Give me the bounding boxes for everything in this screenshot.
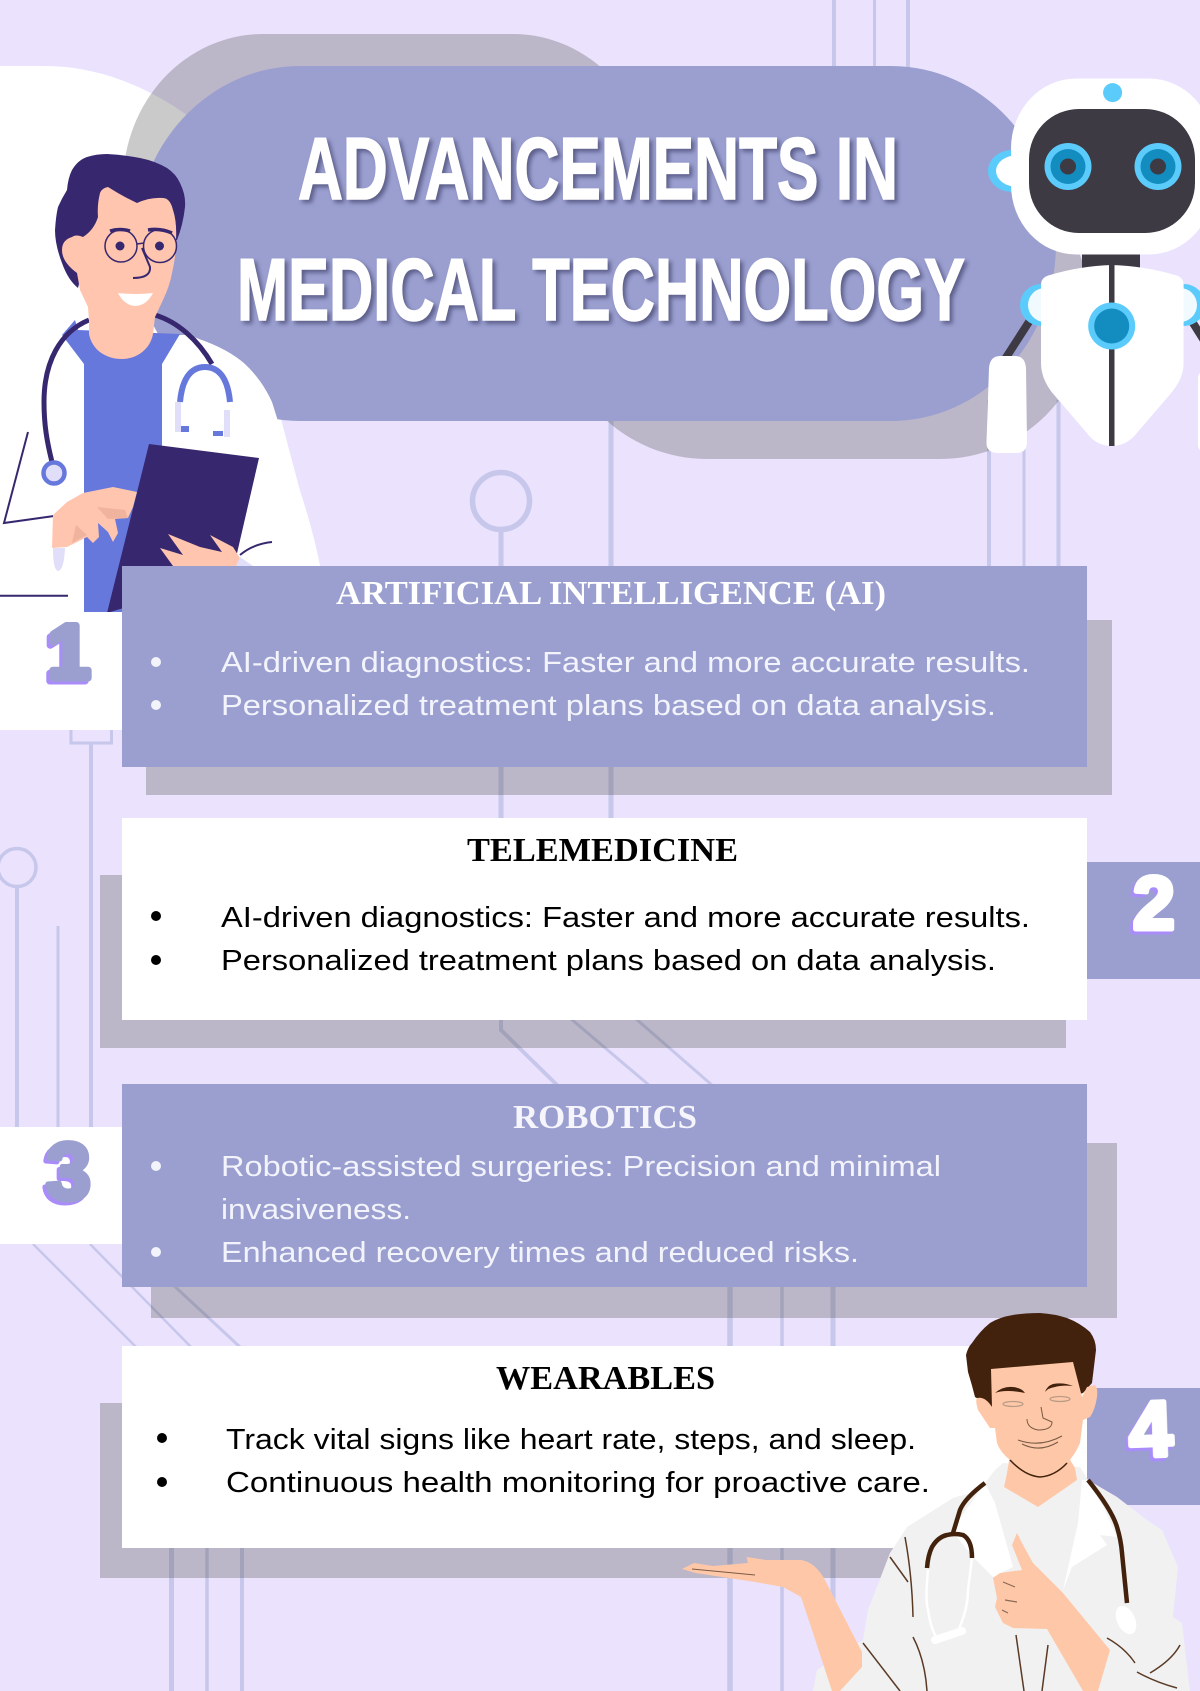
bullet list: telemedicine: AI-driven diagnostics: Faster and more accurate results. — [221, 902, 1030, 934]
illustration: robot — [986, 78, 1200, 453]
bullet list: wearables — [157, 1424, 930, 1499]
bullet list: telemedicine — [151, 902, 1030, 977]
number tab 4: 4 — [1127, 1384, 1174, 1474]
title — [237, 119, 965, 339]
title: ADVANCEMENTS IN — [298, 119, 898, 218]
white backdrop behind doctor — [0, 66, 321, 730]
panel: telemedicine — [100, 818, 1087, 1048]
illustration: doctor with clipboard — [0, 154, 321, 613]
number tab 3: 3 — [46, 1127, 91, 1217]
bullet list: robotics — [151, 1151, 941, 1269]
bullet list: robotics: Robotic-assisted surgeries: Precision and minimal — [221, 1151, 941, 1183]
heading: artificial intelligence: ARTIFICIAL INTELLIGENCE (AI) — [336, 575, 886, 612]
bullet list: artificial intelligence: AI-driven diagnostics: Faster and more accurate results. — [221, 647, 1030, 679]
bullet list: artificial intelligence — [151, 647, 1030, 722]
number tab 2: 2 — [1133, 861, 1175, 945]
panel: artificial intelligence — [122, 566, 1112, 795]
number tab 3 — [0, 1127, 122, 1244]
bullet list: wearables: Track vital signs like heart rate, steps, and sleep. — [226, 1424, 916, 1456]
heading: wearables: WEARABLES — [496, 1360, 715, 1397]
heading: robotics: ROBOTICS — [513, 1099, 697, 1136]
number tab 1 — [0, 610, 122, 730]
panel: robotics — [122, 1084, 1117, 1318]
number tab 1: 1 — [48, 610, 90, 695]
illustration: smiling doctor with thumbs up — [682, 1313, 1190, 1691]
bullet list: telemedicine: Personalized treatment plans based on data analysis. — [221, 945, 996, 977]
heading: telemedicine: TELEMEDICINE — [467, 832, 738, 869]
panel: wearables — [100, 1346, 1087, 1578]
bullet list: artificial intelligence: Personalized treatment plans based on data analysis. — [221, 690, 996, 722]
bullet list: robotics: invasiveness. — [221, 1194, 411, 1226]
title banner shadow, upper — [123, 34, 653, 334]
bullet list: robotics: Enhanced recovery times and reduced risks. — [221, 1237, 859, 1269]
bullet list: wearables: Continuous health monitoring for proactive care. — [226, 1467, 930, 1499]
number tab 2 — [1087, 861, 1200, 979]
title banner shadow, lower — [557, 159, 1090, 459]
title banner — [135, 66, 1056, 421]
number tab 4 — [1087, 1384, 1200, 1505]
